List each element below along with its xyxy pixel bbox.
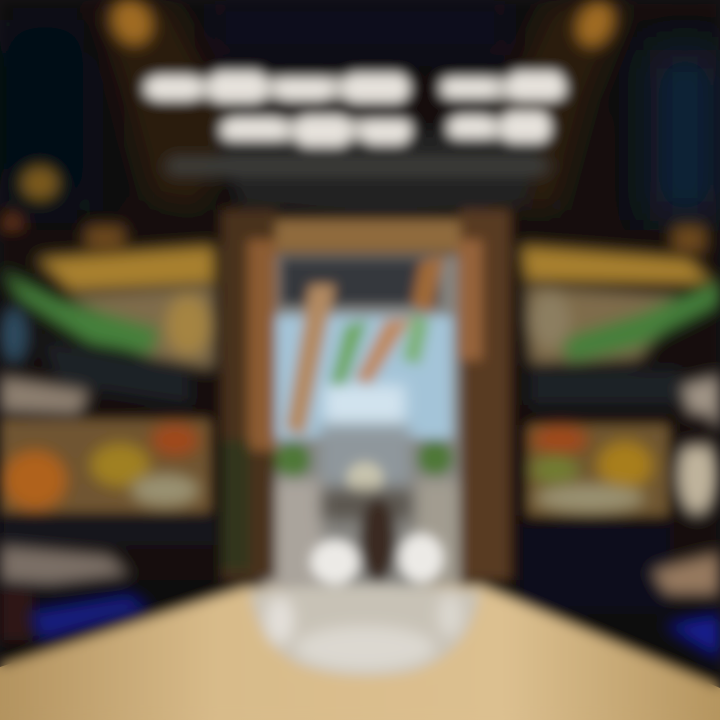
ceiling lights <box>0 0 621 239</box>
wooden door frame <box>222 210 510 580</box>
dark title arch <box>215 130 545 215</box>
subtitle: illegible blurred line <box>165 156 550 176</box>
left shelves <box>0 225 225 640</box>
right shelves <box>505 225 720 658</box>
table top <box>0 586 720 720</box>
title: illegible blurred heading <box>144 72 566 146</box>
table edge underlay <box>0 586 720 720</box>
central doorway interior <box>262 255 460 595</box>
glass bowl <box>250 585 480 676</box>
background: ceiling and dark walls <box>0 0 720 240</box>
